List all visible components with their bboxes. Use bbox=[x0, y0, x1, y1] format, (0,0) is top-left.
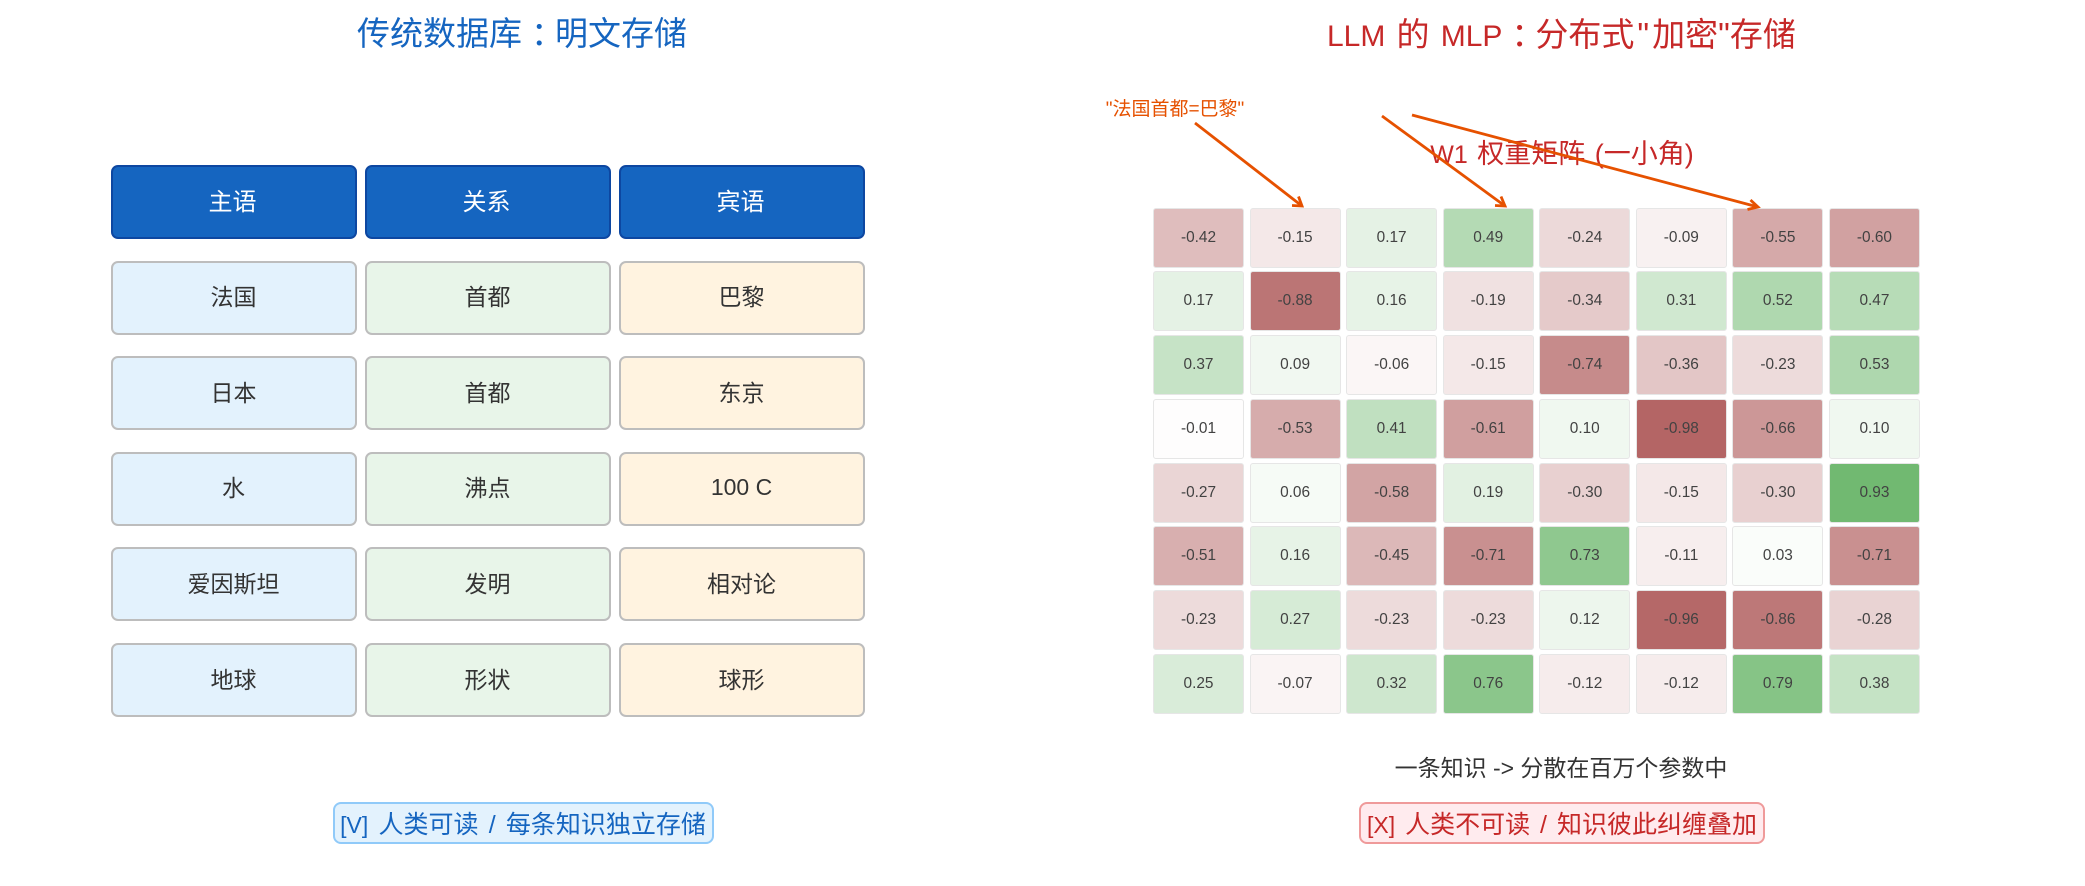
heatmap row 4: -0.66 bbox=[1760, 420, 1795, 437]
badge: human readable: [V] 人类可读 / 每条知识独立存储 bbox=[340, 810, 706, 838]
panel: database table: 地球 bbox=[210, 666, 256, 692]
heatmap row 3 bbox=[1153, 335, 1920, 395]
heatmap row 2: 0.16 bbox=[1377, 292, 1407, 309]
heatmap row 2: 0.52 bbox=[1763, 292, 1793, 309]
heatmap row 7: -0.28 bbox=[1857, 611, 1892, 628]
heatmap row 4 bbox=[1153, 399, 1920, 459]
row 2: Japan capital Tokyo bbox=[111, 356, 865, 430]
heatmap row 1: -0.42 bbox=[1181, 229, 1216, 246]
panel: database table: 首都 bbox=[464, 380, 510, 406]
heatmap row 3: -0.15 bbox=[1471, 356, 1506, 373]
annotation: France capital equals Paris: "法国首都=巴黎" bbox=[1106, 98, 1244, 120]
heatmap row 1: -0.15 bbox=[1278, 229, 1313, 246]
header: relation bbox=[364, 165, 610, 239]
heatmap row 4: -0.98 bbox=[1664, 420, 1699, 437]
heatmap row 3: -0.74 bbox=[1567, 356, 1602, 373]
heatmap row 6: -0.71 bbox=[1857, 547, 1892, 564]
panel: database table: 相对论 bbox=[707, 570, 776, 596]
heatmap row 6: -0.71 bbox=[1471, 547, 1506, 564]
heatmap row 3: -0.06 bbox=[1374, 356, 1409, 373]
heatmap row 2: 0.47 bbox=[1859, 292, 1889, 309]
heatmap row 1: -0.09 bbox=[1664, 229, 1699, 246]
arrow 1 bbox=[1195, 123, 1302, 206]
heatmap row 5: 0.93 bbox=[1859, 484, 1889, 501]
heatmap row 4: 0.41 bbox=[1377, 420, 1407, 437]
heatmap row 7: 0.27 bbox=[1280, 611, 1310, 628]
heatmap row 6: 0.73 bbox=[1570, 547, 1600, 564]
panel: database table: 沸点 bbox=[464, 475, 510, 501]
heatmap row 8: -0.07 bbox=[1278, 675, 1313, 692]
row 3: water boiling point bbox=[111, 452, 865, 526]
heatmap row 5 bbox=[1153, 463, 1920, 523]
heatmap row 1: 0.17 bbox=[1377, 229, 1407, 246]
badge: human readable bbox=[332, 802, 714, 844]
heatmap row 7: -0.23 bbox=[1374, 611, 1409, 628]
panel: database table: 水 bbox=[222, 475, 245, 501]
header: object: 宾语 bbox=[716, 189, 764, 216]
heatmap row 5: -0.58 bbox=[1374, 484, 1409, 501]
panel: database table: 100 C bbox=[711, 474, 772, 500]
heatmap row 1: 0.49 bbox=[1473, 229, 1503, 246]
arrow 2 bbox=[1382, 116, 1505, 206]
heatmap row 4: 0.10 bbox=[1859, 420, 1889, 437]
heatmap row 3: -0.36 bbox=[1664, 356, 1699, 373]
header: object bbox=[618, 165, 864, 239]
heatmap row 7: 0.12 bbox=[1570, 611, 1600, 628]
heatmap row 6: -0.51 bbox=[1181, 547, 1216, 564]
panel: database table: 发明 bbox=[464, 570, 510, 596]
header: subject: 主语 bbox=[208, 189, 256, 216]
heatmap row 5: 0.06 bbox=[1280, 484, 1310, 501]
row 5: Earth shape sphere bbox=[111, 643, 865, 717]
panel: database table: 法国 bbox=[210, 284, 256, 310]
row 4: Einstein relativity bbox=[111, 547, 865, 621]
heatmap row 1: -0.55 bbox=[1760, 229, 1795, 246]
heatmap row 1 bbox=[1153, 208, 1920, 268]
heatmap row 2: 0.31 bbox=[1666, 292, 1696, 309]
heatmap row 7: -0.23 bbox=[1471, 611, 1506, 628]
heatmap row 7: -0.23 bbox=[1181, 611, 1216, 628]
heatmap row 8: 0.25 bbox=[1184, 675, 1213, 692]
heatmap row 4: -0.61 bbox=[1471, 420, 1506, 437]
heatmap row 5: -0.30 bbox=[1567, 484, 1602, 501]
heatmap row 5: -0.27 bbox=[1181, 484, 1216, 501]
panel: database table: 日本 bbox=[210, 380, 256, 406]
heatmap row 2: -0.19 bbox=[1471, 292, 1506, 309]
heatmap row 7: -0.86 bbox=[1760, 611, 1795, 628]
header: relation: 关系 bbox=[462, 189, 510, 216]
heatmap row 5: -0.15 bbox=[1664, 484, 1699, 501]
row 1: France capital Paris bbox=[111, 261, 865, 335]
heatmap row 3: 0.37 bbox=[1184, 356, 1213, 373]
heatmap row 8: 0.38 bbox=[1859, 675, 1889, 692]
heatmap row 6: -0.45 bbox=[1374, 547, 1409, 564]
heatmap row 4: 0.10 bbox=[1570, 420, 1600, 437]
panel: database table: 东京 bbox=[718, 380, 764, 406]
heatmap row 4: -0.01 bbox=[1181, 420, 1216, 437]
panel: database table: 球形 bbox=[718, 666, 764, 692]
heatmap row 5: -0.30 bbox=[1760, 484, 1795, 501]
arrow 3 bbox=[1412, 115, 1758, 210]
heatmap row 7: -0.96 bbox=[1664, 611, 1699, 628]
heatmap row 8: 0.32 bbox=[1377, 675, 1407, 692]
heatmap row 8: 0.79 bbox=[1763, 675, 1793, 692]
heatmap row 6: 0.16 bbox=[1280, 547, 1310, 564]
heatmap row 8: -0.12 bbox=[1567, 675, 1602, 692]
heatmap row 3: -0.23 bbox=[1760, 356, 1795, 373]
heatmap row 8: 0.76 bbox=[1473, 675, 1503, 692]
heatmap row 6 bbox=[1153, 526, 1920, 586]
heatmap row 1: -0.60 bbox=[1857, 229, 1892, 246]
header: subject bbox=[110, 165, 356, 239]
badge: not human readable bbox=[1359, 802, 1765, 844]
label: W1 weight matrix: W1 权重矩阵 (一小角) bbox=[1430, 138, 1694, 168]
heatmap row 1: -0.24 bbox=[1567, 229, 1602, 246]
heatmap row 3: 0.53 bbox=[1859, 356, 1889, 373]
heatmap row 8 bbox=[1153, 654, 1920, 714]
heatmap row 5: 0.19 bbox=[1473, 484, 1503, 501]
heatmap row 2 bbox=[1153, 271, 1920, 331]
heatmap row 2: -0.34 bbox=[1567, 292, 1602, 309]
heatmap row 2: -0.88 bbox=[1278, 292, 1313, 309]
caption: knowledge dispersed: 一条知识 -> 分散在百万个参数中 bbox=[1395, 755, 1727, 781]
panel: database table: 形状 bbox=[464, 666, 510, 692]
panel: database table bbox=[111, 165, 865, 717]
panel: database table: 巴黎 bbox=[718, 284, 764, 310]
heatmap row 7 bbox=[1153, 590, 1920, 650]
title: traditional database: 传统数据库 ：明文存储 bbox=[357, 15, 687, 52]
heatmap: W1 weight matrix bbox=[1153, 208, 1920, 714]
heatmap row 8: -0.12 bbox=[1664, 675, 1699, 692]
heatmap row 6: -0.11 bbox=[1664, 547, 1698, 564]
heatmap row 2: 0.17 bbox=[1184, 292, 1213, 309]
panel: database table: 爱因斯坦 bbox=[188, 570, 280, 596]
heatmap row 3: 0.09 bbox=[1280, 356, 1310, 373]
heatmap row 6: 0.03 bbox=[1763, 547, 1793, 564]
badge: not human readable: [X] 人类不可读 / 知识彼此纠缠叠加 bbox=[1367, 810, 1757, 838]
panel: database table: 首都 bbox=[464, 284, 510, 310]
title: LLM MLP: LLM 的 MLP ：分布式"加密"存储 bbox=[1327, 16, 1796, 53]
heatmap row 4: -0.53 bbox=[1278, 420, 1313, 437]
